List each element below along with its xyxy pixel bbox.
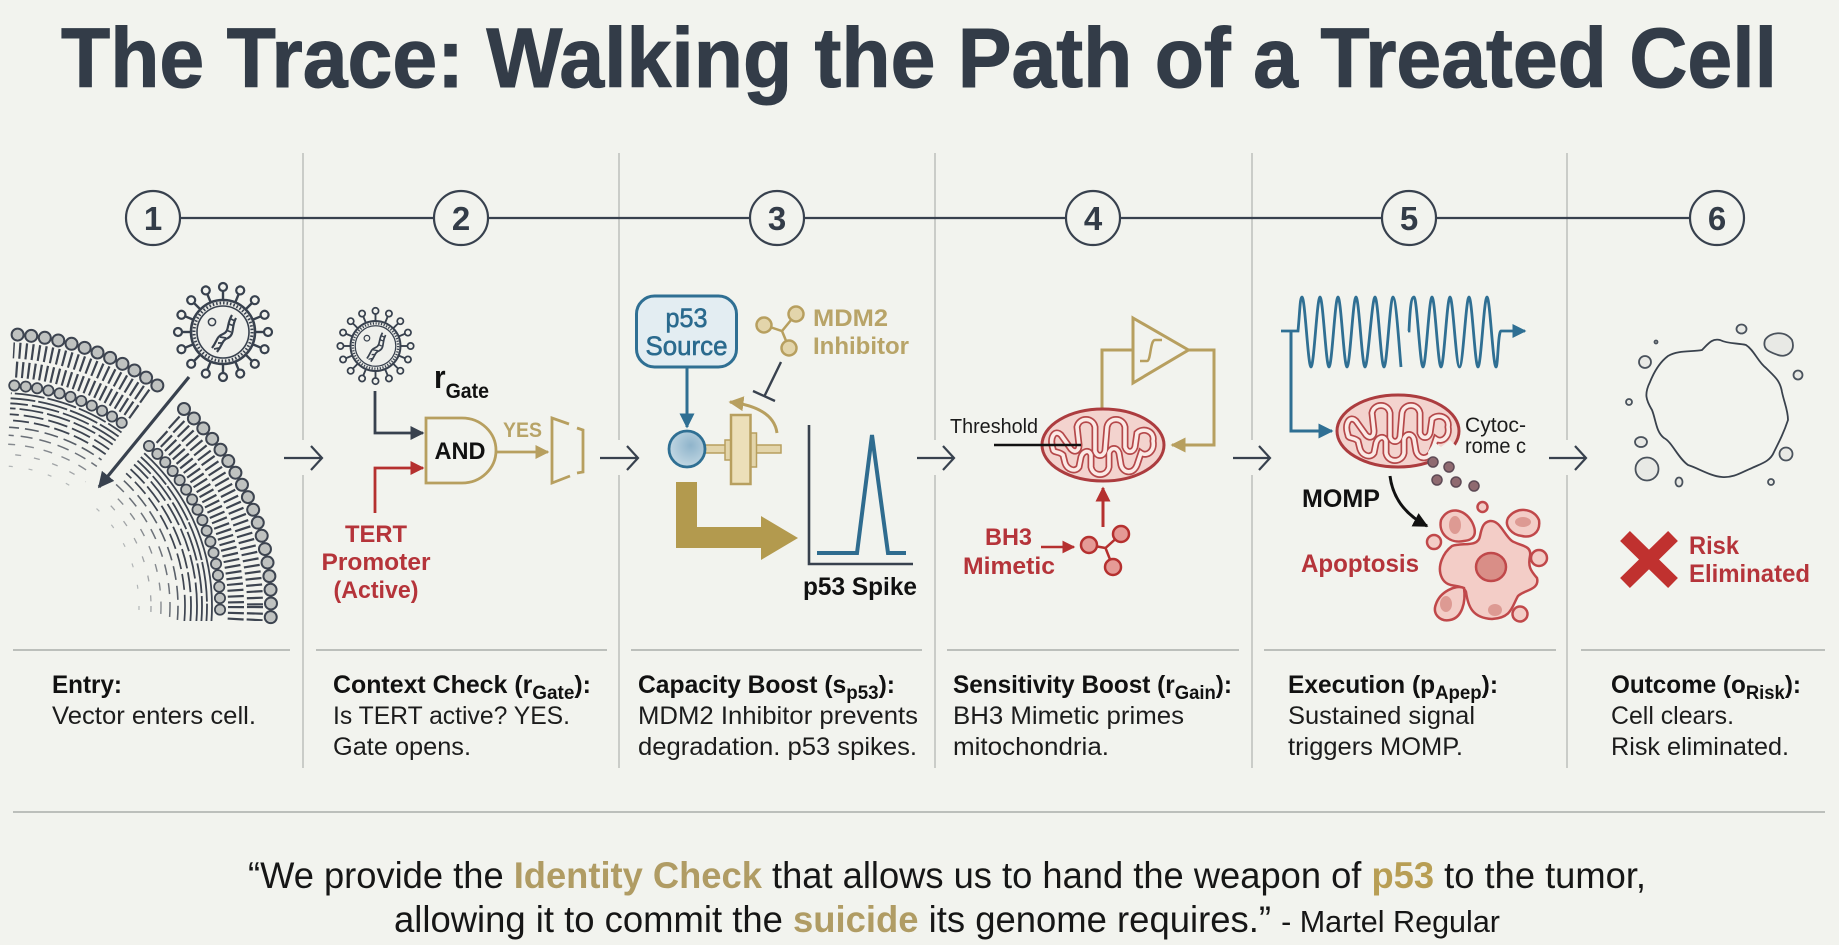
label: Threshold: Threshold [950, 416, 1038, 438]
label: Risk Eliminated: Eliminated [1689, 560, 1810, 588]
caption 5: execution: Apep [1435, 683, 1482, 704]
arrow: vector entering [99, 377, 189, 487]
rod and disc [705, 415, 781, 484]
quote [248, 855, 1646, 940]
icon: opened gate [552, 418, 583, 483]
arrow: label to molecule [1041, 546, 1074, 548]
caption 2: context check: Gate opens. [333, 733, 471, 761]
caption 3: capacity boost: Capacity Boost (s [638, 671, 849, 699]
label: Risk Eliminated [1689, 532, 1810, 588]
arrow: step 1 to 2 [284, 446, 322, 470]
caption 2: context check: ): [574, 671, 591, 699]
caption 4: sensitivity boost: mitochondria. [953, 733, 1109, 761]
arrow: BH3 to mitochondrion [1102, 488, 1104, 527]
curved degradation arrow [730, 402, 777, 433]
step timeline [126, 191, 1744, 245]
label: Risk Eliminated: Risk [1689, 532, 1739, 560]
label: TERT promoter [322, 521, 430, 604]
AND gate: AND [434, 438, 486, 465]
panel 2: context check illustration [322, 308, 583, 604]
caption 5: execution: ): [1482, 671, 1498, 699]
quote: allowing it to commit the suicide its genome requires.” - Martel Regular [394, 899, 1500, 940]
panel 6: outcome illustration [1625, 324, 1810, 588]
arrow: step 2 to 3 [600, 446, 638, 470]
caption 3: capacity boost: degradation. p53 spikes. [638, 733, 917, 761]
step 1 marker [126, 191, 180, 245]
arrow: step 4 to 5 [1233, 446, 1270, 470]
label: BH3 Mimetic [963, 524, 1055, 580]
p53 ball [669, 431, 705, 467]
icon: vector [337, 308, 414, 384]
icon: ruptured mitochondrion [1337, 395, 1462, 470]
curved arrow to apoptosis [1390, 476, 1427, 526]
sustained signal waveform [1281, 297, 1525, 367]
p53 source box: Source [646, 331, 728, 361]
label: TERT promoter: TERT [345, 521, 407, 548]
p53 source box [636, 296, 736, 367]
caption 1: entry: Entry: [52, 671, 122, 699]
icon: apoptotic cell [1427, 502, 1547, 622]
debris [1626, 324, 1802, 486]
step 4 marker: 4 [1084, 200, 1103, 237]
label: p53 Spike: p53 Spike [803, 573, 917, 601]
caption 6: outcome: Risk eliminated. [1611, 733, 1789, 761]
step 3 marker: 3 [768, 200, 786, 237]
step 4 marker [1066, 191, 1120, 245]
connector: signal to mitochondrion [1291, 331, 1332, 431]
caption 3: capacity boost: MDM2 Inhibitor prevents [638, 702, 918, 730]
panel 4: sensitivity boost illustration [950, 318, 1214, 580]
quote: “We provide the Identity Check that allows us to hand the weapon of p53 to the tumor, [248, 855, 1646, 896]
caption 4: sensitivity boost: ): [1216, 671, 1232, 699]
connector: vector to gate [375, 391, 423, 433]
icon: BH3 mimetic molecule [1081, 526, 1129, 575]
arrow: step 3 to 4 [917, 446, 954, 470]
label: MDM2 Inhibitor [813, 305, 909, 360]
caption 1: entry [52, 671, 256, 730]
caption 4: sensitivity boost: BH3 Mimetic primes [953, 702, 1184, 730]
caption 6: outcome: Cell clears. [1611, 702, 1734, 730]
caption 3: capacity boost [638, 671, 918, 761]
feedback amplifier loop [1102, 318, 1214, 445]
label: r Gate: r [434, 359, 446, 395]
label: TERT promoter: Promoter [322, 549, 430, 576]
label: Cytochrome c [1465, 414, 1526, 458]
icon: mitochondrion [1042, 409, 1164, 481]
icon: viral vector [174, 283, 272, 381]
caption 2: context check: Context Check (r [333, 671, 533, 699]
label: MDM2 Inhibitor: Inhibitor [813, 333, 909, 360]
arrow: step 5 to 6 [1549, 446, 1586, 470]
title: The Trace: Walking the Path of a Treated Cell [61, 11, 1777, 105]
label: BH3 Mimetic: Mimetic [963, 553, 1055, 580]
caption 3: capacity boost: ): [879, 671, 895, 699]
label: Apoptosis: Apoptosis [1301, 550, 1419, 578]
p53 source box: p53 [666, 303, 708, 333]
label: YES: YES [503, 419, 542, 442]
caption 2: context check: Gate [532, 683, 574, 704]
AND gate [426, 418, 496, 483]
panel 1: entry illustration [8, 282, 278, 624]
caption 5: execution: triggers MOMP. [1288, 733, 1463, 761]
step 3 marker [750, 191, 804, 245]
panel 5: execution illustration [1281, 297, 1547, 622]
panel 3: capacity boost illustration [636, 296, 917, 601]
label: BH3 Mimetic: BH3 [985, 524, 1032, 551]
inhibition mark [753, 362, 781, 401]
caption 3: capacity boost: p53 [846, 683, 879, 704]
step 2 marker: 2 [452, 200, 470, 237]
caption 6: outcome [1611, 671, 1801, 761]
connector: promoter to gate [375, 468, 423, 513]
icon: red X [1625, 536, 1673, 583]
label: MOMP: MOMP [1302, 485, 1380, 513]
step 2 marker [434, 191, 488, 245]
caption 4: sensitivity boost [953, 671, 1232, 761]
caption 1: entry: Vector enters cell. [52, 702, 256, 730]
caption 6: outcome: Risk [1746, 683, 1785, 704]
caption 2: context check [333, 671, 591, 761]
cytochrome c particles [1428, 457, 1479, 491]
caption 6: outcome: ): [1785, 671, 1801, 699]
step 6 marker: 6 [1708, 200, 1726, 237]
caption 4: sensitivity boost: Gain [1175, 683, 1216, 704]
p53 spike chart [809, 425, 913, 564]
label: TERT promoter: (Active) [334, 577, 418, 604]
caption 5: execution: Execution (p [1288, 671, 1438, 699]
caption 5: execution: Sustained signal [1288, 702, 1475, 730]
big gold arrow [676, 482, 798, 560]
threshold line [994, 444, 1081, 446]
caption 6: outcome: Outcome (o [1611, 671, 1750, 699]
caption 4: sensitivity boost: Sensitivity Boost (r [953, 671, 1181, 699]
icon: cleared cell outline [1646, 340, 1788, 477]
arrow: source to ball [686, 367, 688, 427]
step 5 marker [1382, 191, 1436, 245]
label: r Gate: Gate [446, 380, 489, 403]
icon: MDM2 inhibitor molecule [756, 306, 804, 356]
label: Cytochrome c: Cytoc- [1465, 414, 1526, 437]
label: Cytochrome c: rome c [1465, 435, 1526, 458]
arrow: YES output [497, 451, 548, 453]
step 1 marker: 1 [144, 200, 162, 237]
cell membrane [8, 328, 278, 624]
caption 2: context check: Is TERT active? YES. [333, 702, 570, 730]
step 5 marker: 5 [1400, 200, 1418, 237]
label: MDM2 Inhibitor: MDM2 [813, 305, 888, 332]
caption 5: execution [1288, 671, 1498, 761]
step 6 marker [1690, 191, 1744, 245]
